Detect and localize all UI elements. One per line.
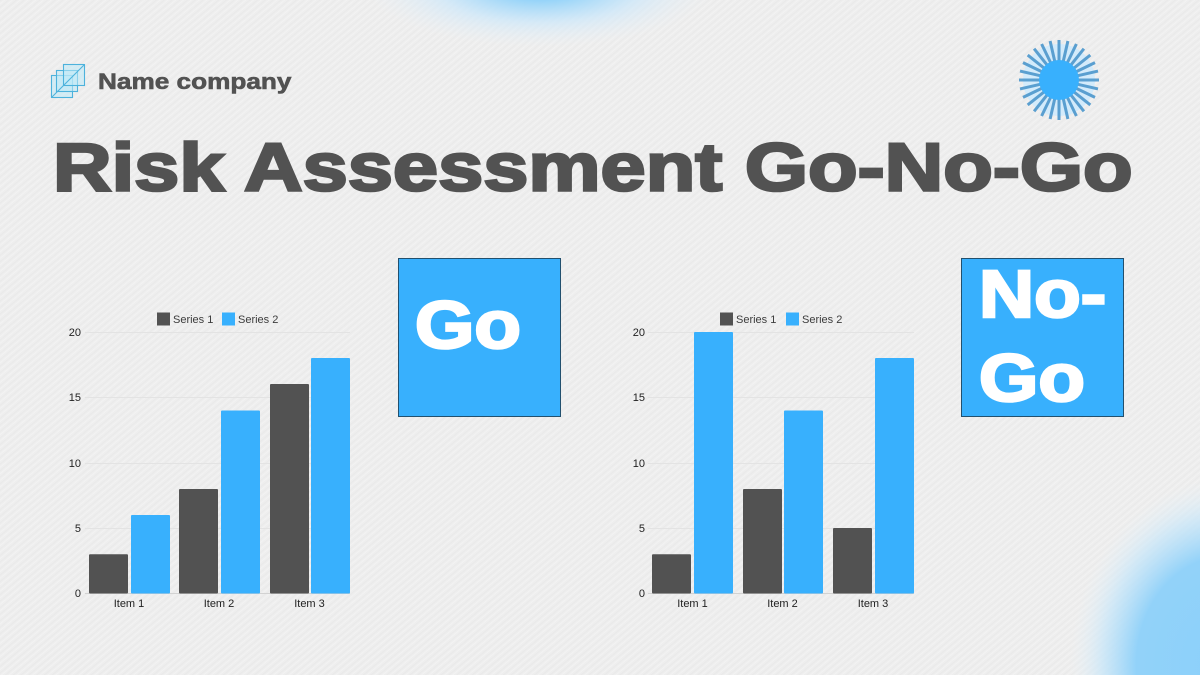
x axis labels <box>114 598 325 610</box>
y axis labels: 0 <box>75 588 81 600</box>
x axis labels: Item 1 <box>677 598 708 610</box>
callout: No-Go: Go <box>979 341 1085 416</box>
y axis labels: 15 <box>633 392 645 404</box>
chart: Go <box>69 312 350 610</box>
x axis labels <box>677 598 888 610</box>
gridlines <box>648 332 914 528</box>
callout: Go: Go <box>415 288 521 363</box>
y axis labels: 5 <box>75 523 81 535</box>
legend <box>157 312 278 326</box>
y axis labels <box>633 327 645 600</box>
y axis labels: 10 <box>69 458 81 470</box>
axis baseline <box>85 592 350 594</box>
chart: No-Go <box>633 312 914 610</box>
callout: No-Go: No- <box>979 257 1106 332</box>
gridlines <box>85 332 350 528</box>
y axis labels: 5 <box>639 523 645 535</box>
x axis labels: Item 3 <box>294 598 325 610</box>
legend: Series 2 <box>802 314 842 326</box>
title: Risk Assessment Go-No-Go <box>53 129 1133 205</box>
legend: Series 1 <box>736 314 776 326</box>
legend: Series 1 <box>173 314 213 326</box>
callout: Go <box>398 258 560 416</box>
callout: No-Go <box>962 257 1124 416</box>
top glow <box>360 0 720 50</box>
y axis labels: 20 <box>69 327 81 339</box>
x axis labels: Item 1 <box>114 598 144 610</box>
x axis labels: Item 2 <box>204 598 234 610</box>
y axis labels: 20 <box>633 327 645 339</box>
series 2 bars <box>694 332 914 594</box>
legend: Series 2 <box>238 314 278 326</box>
x axis labels: Item 3 <box>858 598 888 610</box>
series 1 bars <box>89 384 309 594</box>
bottom-right glow <box>1065 470 1200 675</box>
y axis labels: 10 <box>633 458 645 470</box>
series 1 bars <box>652 489 872 594</box>
axis baseline <box>648 592 914 594</box>
icon: blue sunburst <box>1019 40 1099 120</box>
y axis labels: 0 <box>639 588 645 600</box>
y axis labels <box>69 327 81 600</box>
company name: Name company <box>98 70 292 94</box>
logo icon: wireframe cubes <box>52 64 84 98</box>
x axis labels: Item 2 <box>767 598 798 610</box>
y axis labels: 15 <box>69 392 81 404</box>
legend <box>720 312 842 326</box>
series 2 bars <box>131 358 350 594</box>
